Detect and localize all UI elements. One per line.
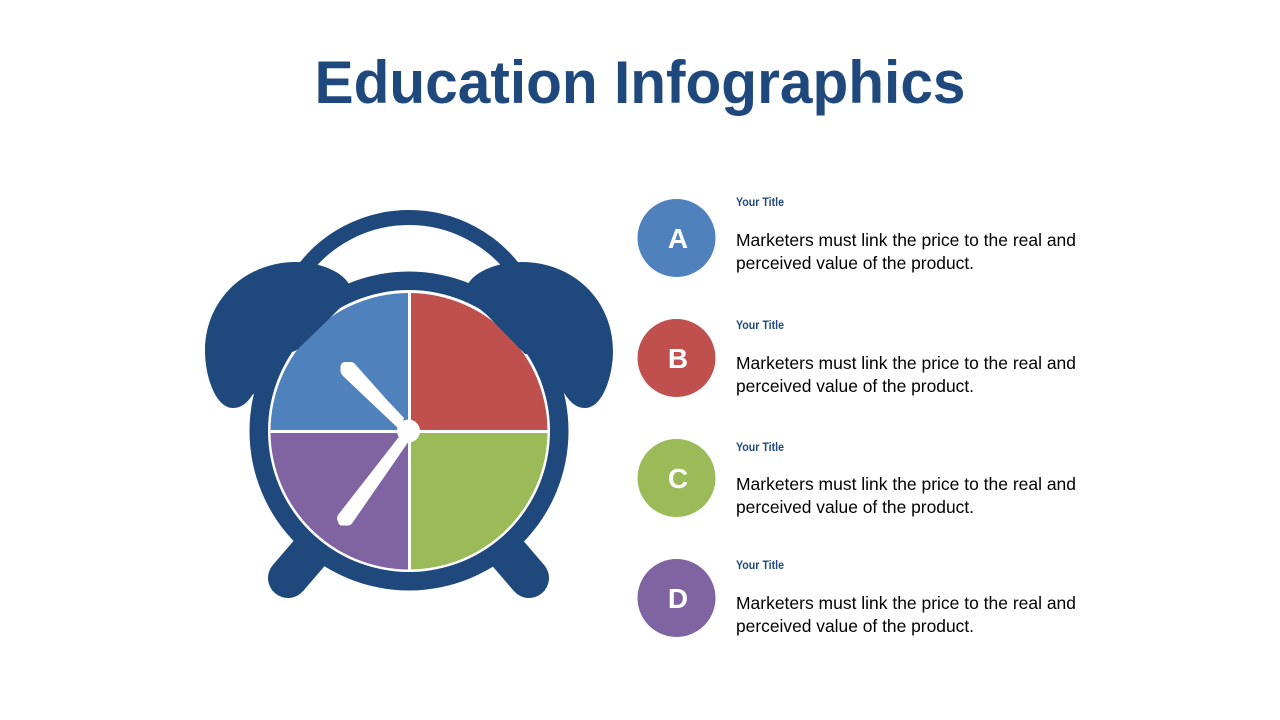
clock body ring bbox=[250, 272, 568, 590]
description B: perceived value of the product. bbox=[736, 376, 974, 396]
description B bbox=[736, 353, 1076, 396]
description B: Marketers must link the price to the real and bbox=[736, 353, 1076, 373]
description A bbox=[736, 230, 1076, 273]
minute hand upper bbox=[340, 362, 404, 430]
description C: perceived value of the product. bbox=[736, 497, 974, 517]
description D: perceived value of the product. bbox=[736, 616, 974, 636]
right bell bbox=[468, 262, 613, 408]
pie segment: blue bbox=[270, 293, 408, 430]
heading B: Your Title bbox=[736, 320, 784, 332]
description C: Marketers must link the price to the real and bbox=[736, 474, 1076, 494]
title: Education Infographics bbox=[314, 49, 966, 116]
clock top handle bbox=[303, 218, 515, 270]
item A: A bbox=[668, 223, 688, 254]
hour hand lower bbox=[337, 432, 411, 526]
item C: C bbox=[668, 463, 688, 494]
alarm clock illustration bbox=[205, 218, 613, 590]
badge D bbox=[638, 559, 716, 637]
clock feet bbox=[288, 535, 529, 578]
hub bbox=[397, 420, 420, 442]
description D: Marketers must link the price to the real and bbox=[736, 593, 1076, 613]
item A bbox=[638, 197, 1076, 277]
heading A: Your Title bbox=[736, 197, 784, 209]
heading D: Your Title bbox=[736, 560, 784, 572]
item D: D bbox=[668, 583, 688, 614]
description A: perceived value of the product. bbox=[736, 253, 974, 273]
item D bbox=[638, 559, 1076, 637]
left bell bbox=[205, 262, 349, 408]
heading C: Your Title bbox=[736, 442, 784, 454]
pie segment: red bbox=[411, 293, 548, 430]
badge C bbox=[638, 439, 716, 517]
item B: B bbox=[668, 343, 688, 374]
badge A bbox=[638, 199, 716, 277]
clock face pie chart bbox=[270, 293, 548, 570]
pie segment: green bbox=[411, 433, 548, 570]
badge B bbox=[638, 319, 716, 397]
description D bbox=[736, 593, 1076, 636]
item C bbox=[638, 439, 1076, 517]
clock hands bbox=[337, 362, 420, 526]
pie segment: purple bbox=[270, 433, 408, 570]
description A: Marketers must link the price to the real and bbox=[736, 230, 1076, 250]
description C bbox=[736, 474, 1076, 517]
item B bbox=[638, 319, 1076, 397]
